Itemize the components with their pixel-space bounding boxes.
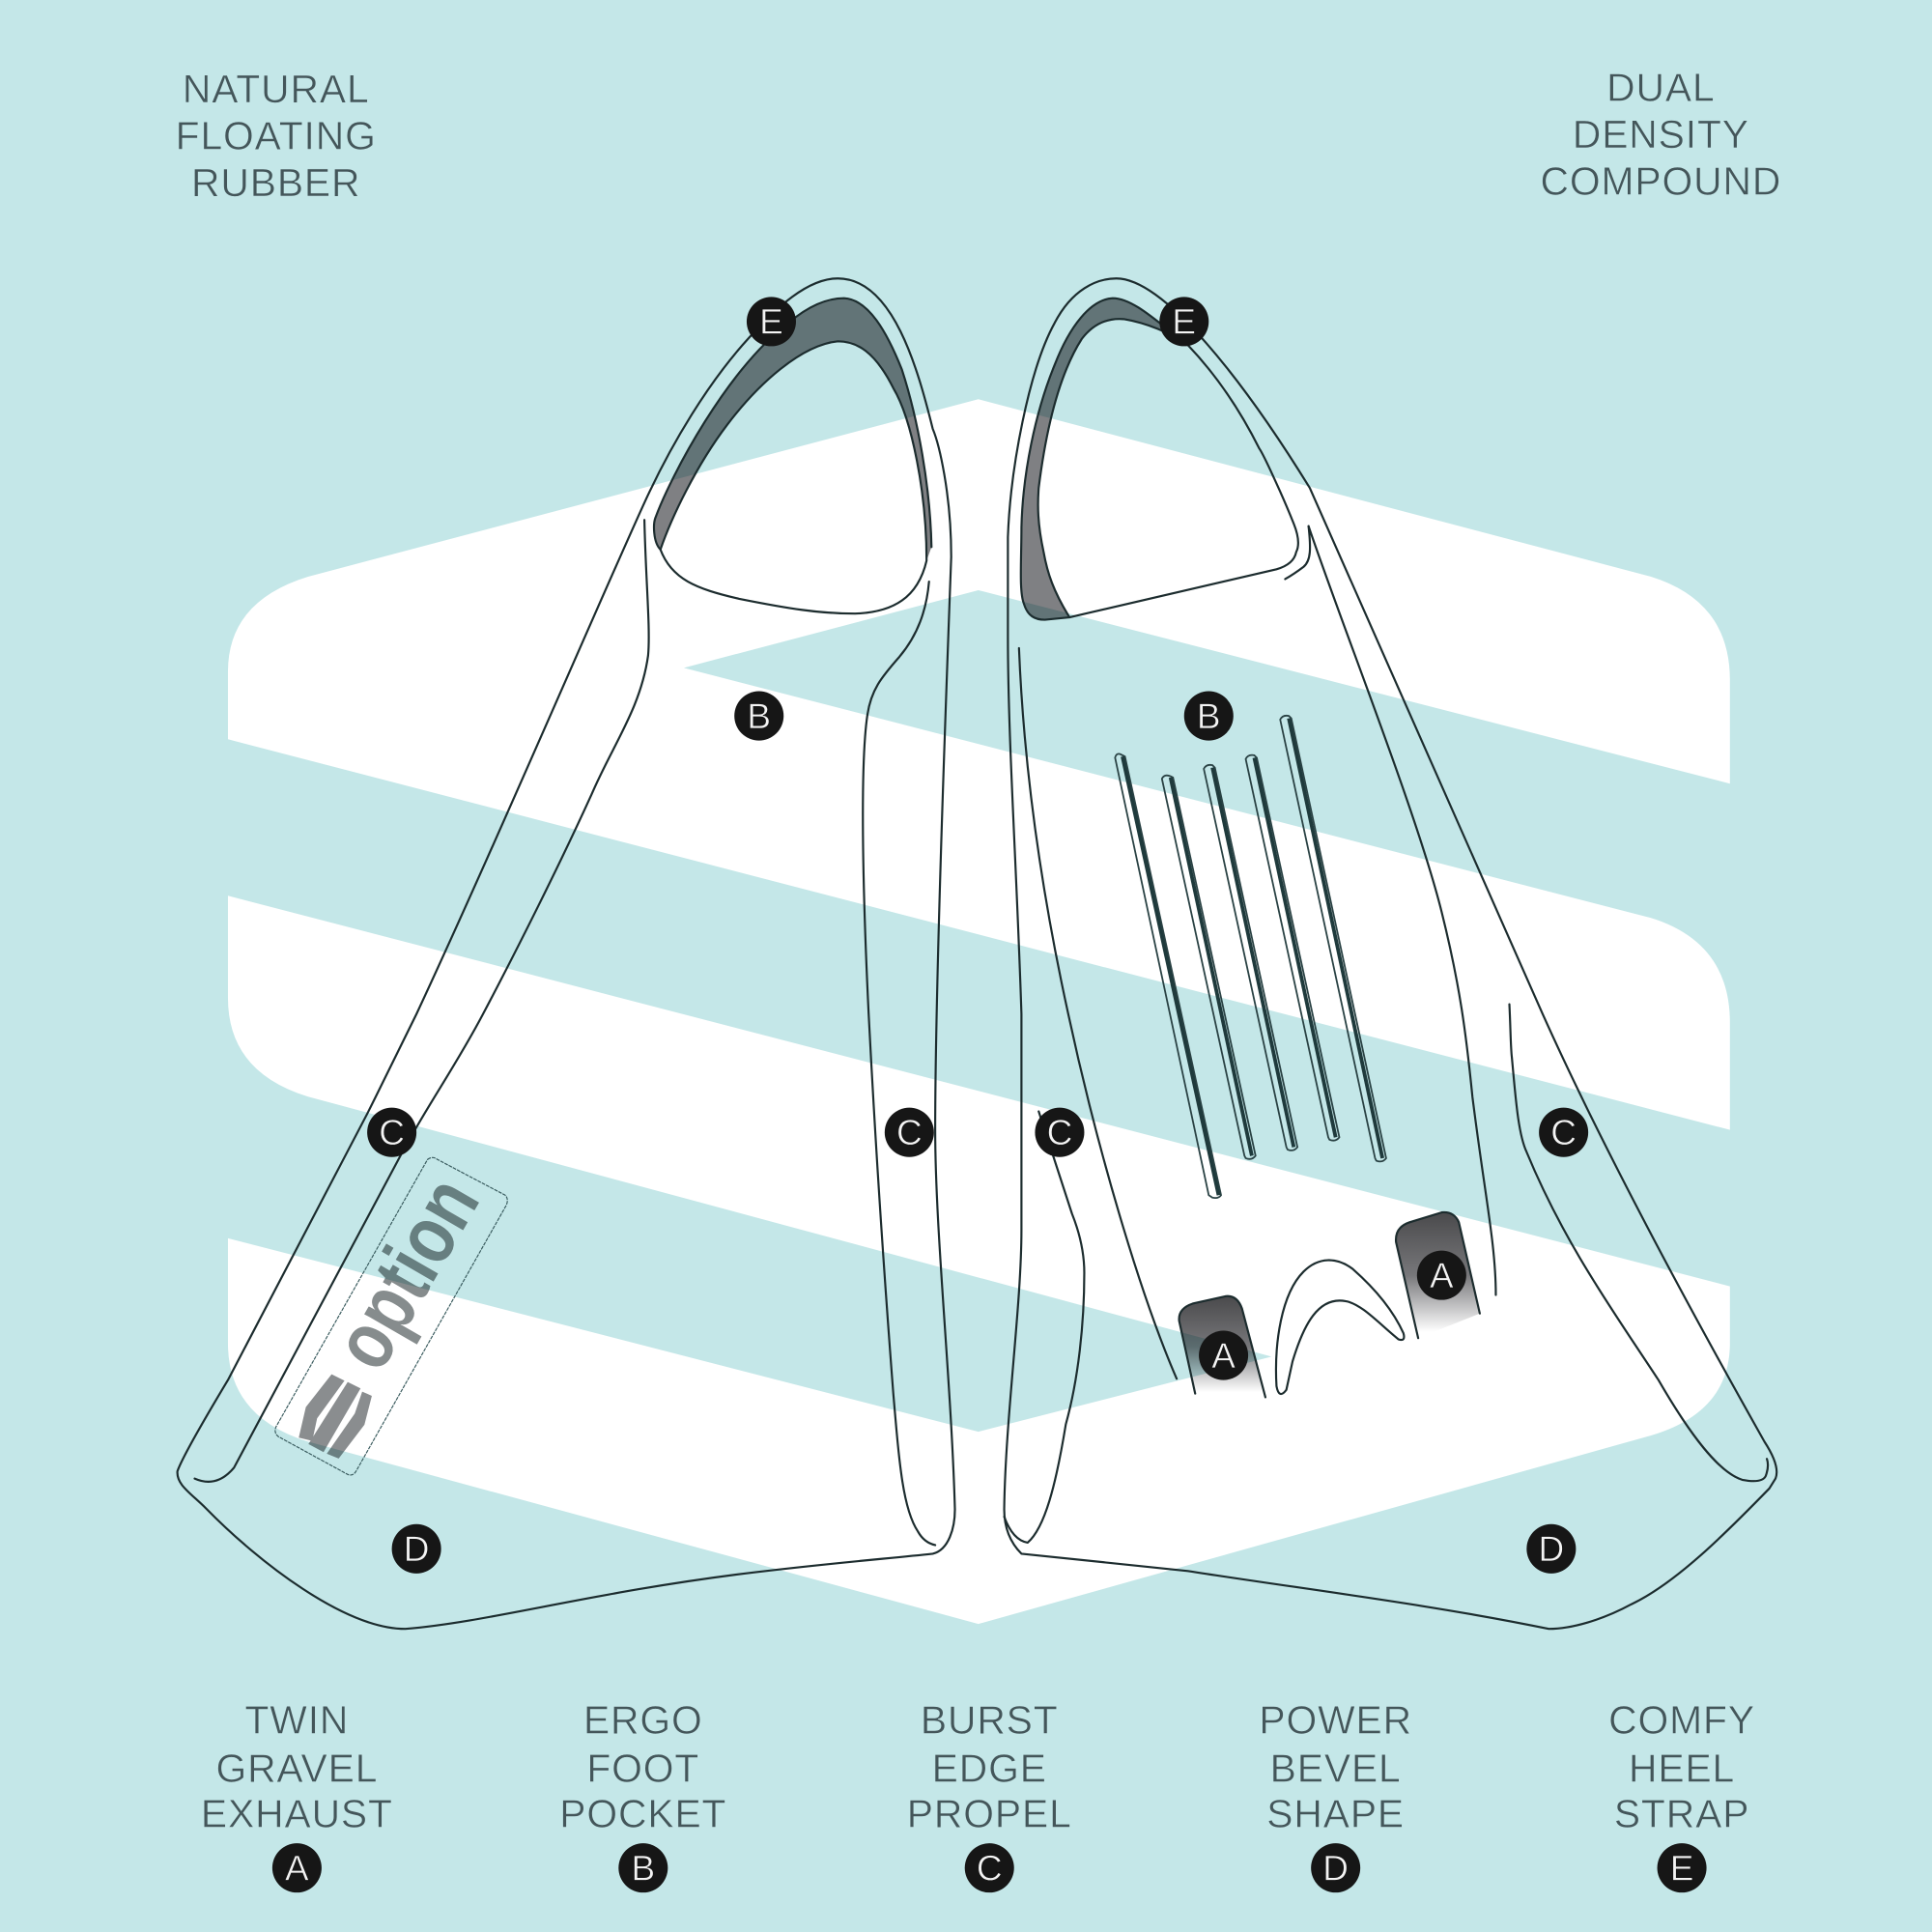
heel strap shading: [654, 298, 931, 560]
legend: comfy heel strap: HEEL: [1629, 1746, 1735, 1790]
inner edge far right: [1509, 1005, 1768, 1481]
bevel swoosh: [1276, 1261, 1404, 1394]
inner curve near burst edge: [1005, 1112, 1084, 1543]
legend: burst edge propel: [907, 1698, 1072, 1892]
sticker logo: [275, 1157, 507, 1475]
legend: power bevel shape: BEVEL: [1270, 1746, 1402, 1790]
heel strap shading: [1021, 298, 1188, 620]
legend: ergo foot pocket: B: [631, 1848, 655, 1888]
legend: ergo foot pocket: [559, 1698, 726, 1892]
legend: ergo foot pocket: FOOT: [586, 1746, 699, 1790]
legend: burst edge propel: C: [977, 1848, 1003, 1888]
badge: C right fin inner: C: [1047, 1113, 1072, 1152]
legend: comfy heel strap: COMFY: [1608, 1698, 1755, 1743]
badge: E left: E: [759, 302, 783, 342]
legend: twin gravel exhaust: TWIN: [244, 1698, 349, 1743]
outer outline: [1005, 278, 1776, 1629]
sticker S mark: [298, 1375, 372, 1459]
badge: B left: [734, 692, 783, 741]
heading: dual density compound: DUAL: [1606, 66, 1716, 110]
heading: dual density compound: DENSITY: [1573, 112, 1749, 156]
badge: B left: B: [747, 696, 771, 736]
heading: natural floating rubber: NATURAL: [183, 67, 370, 111]
heel strap outline: [654, 298, 931, 550]
legend: power bevel shape: D: [1322, 1848, 1349, 1888]
sticker wordmark: option: [316, 1162, 497, 1384]
legend: burst edge propel: PROPEL: [907, 1792, 1072, 1836]
legend: ergo foot pocket: POCKET: [559, 1792, 726, 1836]
legend: burst edge propel: EDGE: [932, 1746, 1047, 1790]
badge: C left fin outer: [367, 1108, 416, 1157]
badge: A pad left: A: [1211, 1336, 1236, 1376]
pocket corner hook: [1285, 526, 1310, 579]
gravel exhaust pad left: [1179, 1296, 1265, 1397]
legend: comfy heel strap: [1608, 1698, 1755, 1892]
foot pocket opening: [661, 341, 926, 613]
badge: B right: [1184, 692, 1234, 741]
badge: E right: [1159, 297, 1208, 346]
badge: C left fin inner: [885, 1108, 934, 1157]
badge: D left: D: [404, 1529, 429, 1569]
badge: D right: D: [1539, 1529, 1564, 1569]
legend: comfy heel strap: E: [1670, 1848, 1693, 1888]
badge: E right: E: [1172, 302, 1196, 342]
ergo foot rails: [1115, 716, 1386, 1198]
badge: C right fin outer: [1539, 1108, 1588, 1157]
badge: E left: [747, 297, 796, 346]
legend: twin gravel exhaust: EXHAUST: [201, 1792, 393, 1836]
badge: A pad left: [1199, 1331, 1248, 1380]
heading: natural floating rubber: RUBBER: [191, 160, 360, 205]
inner edge right: [863, 582, 935, 1545]
badge: C right fin inner: [1035, 1108, 1084, 1157]
badge: C right fin outer: C: [1550, 1113, 1577, 1152]
inner edge left: [195, 520, 649, 1482]
legend: burst edge propel: BURST: [921, 1698, 1059, 1743]
badge: D left: [392, 1524, 441, 1574]
right fin: [1005, 278, 1776, 1629]
inner edge left: [1019, 648, 1177, 1378]
legend: ergo foot pocket: ERGO: [583, 1698, 703, 1743]
outer outline: [178, 278, 955, 1629]
badge: B right: B: [1197, 696, 1221, 736]
gravel exhaust pad right: [1396, 1212, 1480, 1338]
legend: twin gravel exhaust: A: [285, 1848, 309, 1888]
legend: power bevel shape: POWER: [1259, 1698, 1412, 1743]
badge: C left fin inner: C: [896, 1113, 923, 1152]
heading: dual density compound: COMPOUND: [1541, 159, 1781, 204]
inner edge right: [1309, 526, 1495, 1295]
badge: C left fin outer: C: [379, 1113, 405, 1152]
legend: twin gravel exhaust: [201, 1698, 393, 1892]
legend: twin gravel exhaust: GRAVEL: [215, 1746, 378, 1790]
foot pocket opening: [1038, 319, 1298, 617]
heading: natural floating rubber: FLOATING: [176, 113, 377, 157]
legend: power bevel shape: [1259, 1698, 1412, 1892]
white S logo background: [228, 399, 1730, 1624]
badge: A pad right: [1417, 1251, 1466, 1300]
legend: power bevel shape: SHAPE: [1266, 1792, 1405, 1836]
heel strap outline: [1021, 298, 1188, 620]
badge: A pad right: A: [1430, 1256, 1454, 1295]
sticker border: [275, 1157, 507, 1475]
legend: comfy heel strap: STRAP: [1614, 1792, 1749, 1836]
left fin: [178, 278, 955, 1629]
badge: D right: [1526, 1524, 1576, 1574]
